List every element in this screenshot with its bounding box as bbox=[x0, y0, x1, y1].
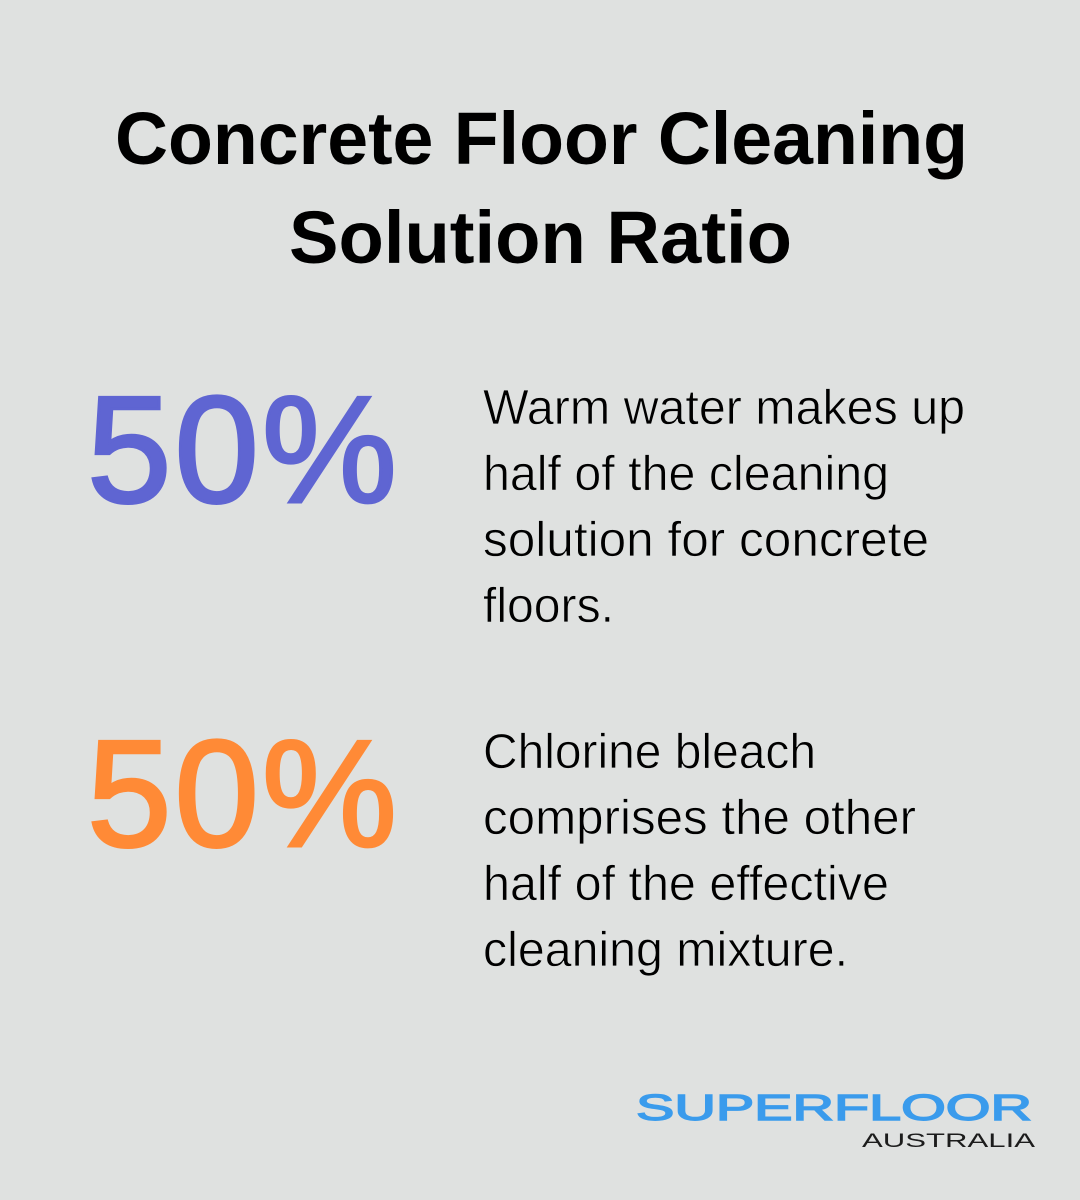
description: chlorine bleach: comprises the other bbox=[483, 791, 916, 845]
description: chlorine bleach bbox=[483, 725, 916, 977]
percentage: 50% orange: 50% bbox=[87, 709, 397, 879]
description: warm water: Warm water makes up bbox=[483, 381, 965, 435]
description: warm water: half of the cleaning bbox=[483, 447, 889, 501]
stat: warm water 50% bbox=[87, 365, 965, 633]
percentage: 50% purple: 50% bbox=[87, 365, 397, 535]
title: Concrete Floor Cleaning bbox=[115, 97, 968, 180]
title bbox=[115, 97, 968, 279]
logo: Superfloor Australia: AUSTRALIA bbox=[862, 1130, 1035, 1152]
logo: Superfloor Australia: SUPERFLOOR bbox=[636, 1087, 1032, 1128]
title: Solution Ratio bbox=[289, 196, 792, 279]
description: warm water: solution for concrete bbox=[483, 513, 929, 567]
description: warm water: floors. bbox=[483, 579, 614, 633]
description: chlorine bleach: cleaning mixture. bbox=[483, 923, 848, 977]
logo: Superfloor Australia bbox=[636, 1087, 1035, 1152]
description: warm water bbox=[483, 381, 965, 633]
description: chlorine bleach: half of the effective bbox=[483, 857, 889, 911]
stat: chlorine bleach 50% bbox=[87, 709, 916, 977]
description: chlorine bleach: Chlorine bleach bbox=[483, 725, 816, 779]
